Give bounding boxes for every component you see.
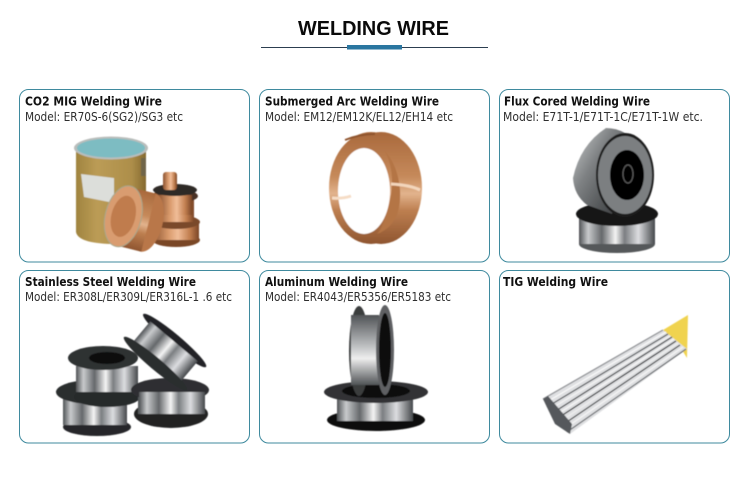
title: WELDING WIRE <box>298 18 449 40</box>
image: bundle of TIG rods with yellow tag <box>543 315 688 434</box>
panel: stainless steel welding wire <box>20 270 250 443</box>
panel: submerged arc welding wire <box>260 90 490 262</box>
model text: stainless steel: Model: ER308L/ER309L/ER316L-1 .6 etc <box>25 290 232 304</box>
title underline <box>261 45 488 50</box>
panel: aluminum welding wire <box>260 270 490 443</box>
heading: CO2 MIG: CO2 MIG Welding Wire <box>25 94 162 108</box>
image: fibre drum and copper spools <box>74 136 200 256</box>
panel: CO2 MIG welding wire <box>20 90 250 262</box>
model text: flux cored: Model: E71T-1/E71T-1C/E71T-1W etc. <box>503 110 703 124</box>
image: copper wire coil <box>329 132 422 244</box>
model text: CO2 MIG: Model: ER70S-6(SG2)/SG3 etc <box>25 110 183 124</box>
heading: submerged arc: Submerged Arc Welding Wire <box>265 94 439 108</box>
panel: TIG welding wire <box>500 270 730 443</box>
image: four stainless steel spools <box>56 310 210 436</box>
image: two aluminum spools <box>324 305 428 431</box>
heading: aluminum: Aluminum Welding Wire <box>265 275 408 289</box>
model text: aluminum: Model: ER4043/ER5356/ER5183 etc <box>265 290 451 304</box>
heading: stainless steel: Stainless Steel Welding Wire <box>25 275 196 289</box>
model text: submerged arc: Model: EM12/EM12K/EL12/EH14 etc <box>265 110 453 124</box>
image: two grey flux cored spools <box>573 128 658 253</box>
heading: TIG: TIG Welding Wire <box>503 275 608 289</box>
panel: flux cored welding wire <box>500 90 730 262</box>
heading: flux cored: Flux Cored Welding Wire <box>504 94 650 108</box>
